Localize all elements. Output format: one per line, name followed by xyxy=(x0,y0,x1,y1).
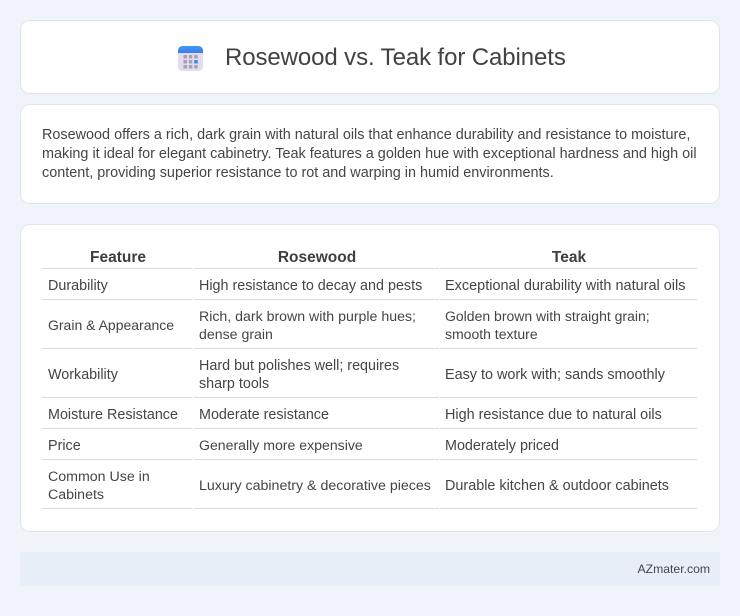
row: price: Generally more expensive xyxy=(199,437,363,453)
row: grain and appearance xyxy=(48,308,650,342)
title: Rosewood vs. Teak for Cabinets xyxy=(225,44,566,71)
row: durability: Exceptional durability with natural oils xyxy=(445,278,685,294)
row: common use in cabinets: Cabinets xyxy=(48,487,104,503)
row: workability: Hard but polishes well; requires xyxy=(199,358,399,374)
intro text xyxy=(42,127,697,181)
row: workability: sharp tools xyxy=(199,376,269,392)
row: common use in cabinets: Common Use in xyxy=(48,469,150,485)
row: grain and appearance: dense grain xyxy=(199,326,273,342)
row: moisture resistance xyxy=(48,407,662,423)
row: durability xyxy=(48,278,685,294)
row: price: Price xyxy=(48,438,81,454)
panel: comparison table xyxy=(20,224,720,532)
row: grain and appearance: Grain & Appearance xyxy=(48,317,174,333)
row: moisture resistance: Moderate resistance xyxy=(199,407,329,423)
intro text: Rosewood offers a rich, dark grain with natural oils that enhance durability and resistance to moisture, xyxy=(42,127,690,143)
row: durability: Durability xyxy=(48,278,108,294)
row: durability: High resistance to decay and pests xyxy=(199,278,422,294)
intro text: making it ideal for elegant cabinetry. Teak features a golden hue with exceptional hardness and high oil xyxy=(42,146,697,162)
row: workability: Workability xyxy=(48,367,118,383)
table header: Feature xyxy=(90,249,146,266)
row: grain and appearance: Golden brown with straight grain; xyxy=(445,308,650,324)
table header: Teak xyxy=(552,249,586,266)
row: moisture resistance: High resistance due to natural oils xyxy=(445,407,662,423)
table header: Rosewood xyxy=(278,249,356,266)
panel: introduction xyxy=(20,104,720,204)
row: workability: Easy to work with; sands smoothly xyxy=(445,367,665,383)
row: moisture resistance: Moisture Resistance xyxy=(48,407,178,423)
row: common use in cabinets: Luxury cabinetry & decorative pieces xyxy=(199,478,431,494)
icon: calendar xyxy=(178,46,203,71)
row: price xyxy=(48,437,559,454)
row: price: Moderately priced xyxy=(445,438,559,454)
row: grain and appearance: Rich, dark brown with purple hues; xyxy=(199,308,416,324)
panel: title card xyxy=(20,20,720,94)
row: workability xyxy=(48,358,665,392)
footer bar xyxy=(20,552,720,586)
row: common use in cabinets: Durable kitchen & outdoor cabinets xyxy=(445,478,669,494)
intro text: content, providing superior resistance to rot and warping in humid environments. xyxy=(42,165,554,181)
footer source text: AZmater.com xyxy=(638,562,710,576)
row: grain and appearance: smooth texture xyxy=(445,326,538,342)
row: common use in cabinets xyxy=(48,469,669,503)
table header xyxy=(90,249,586,266)
